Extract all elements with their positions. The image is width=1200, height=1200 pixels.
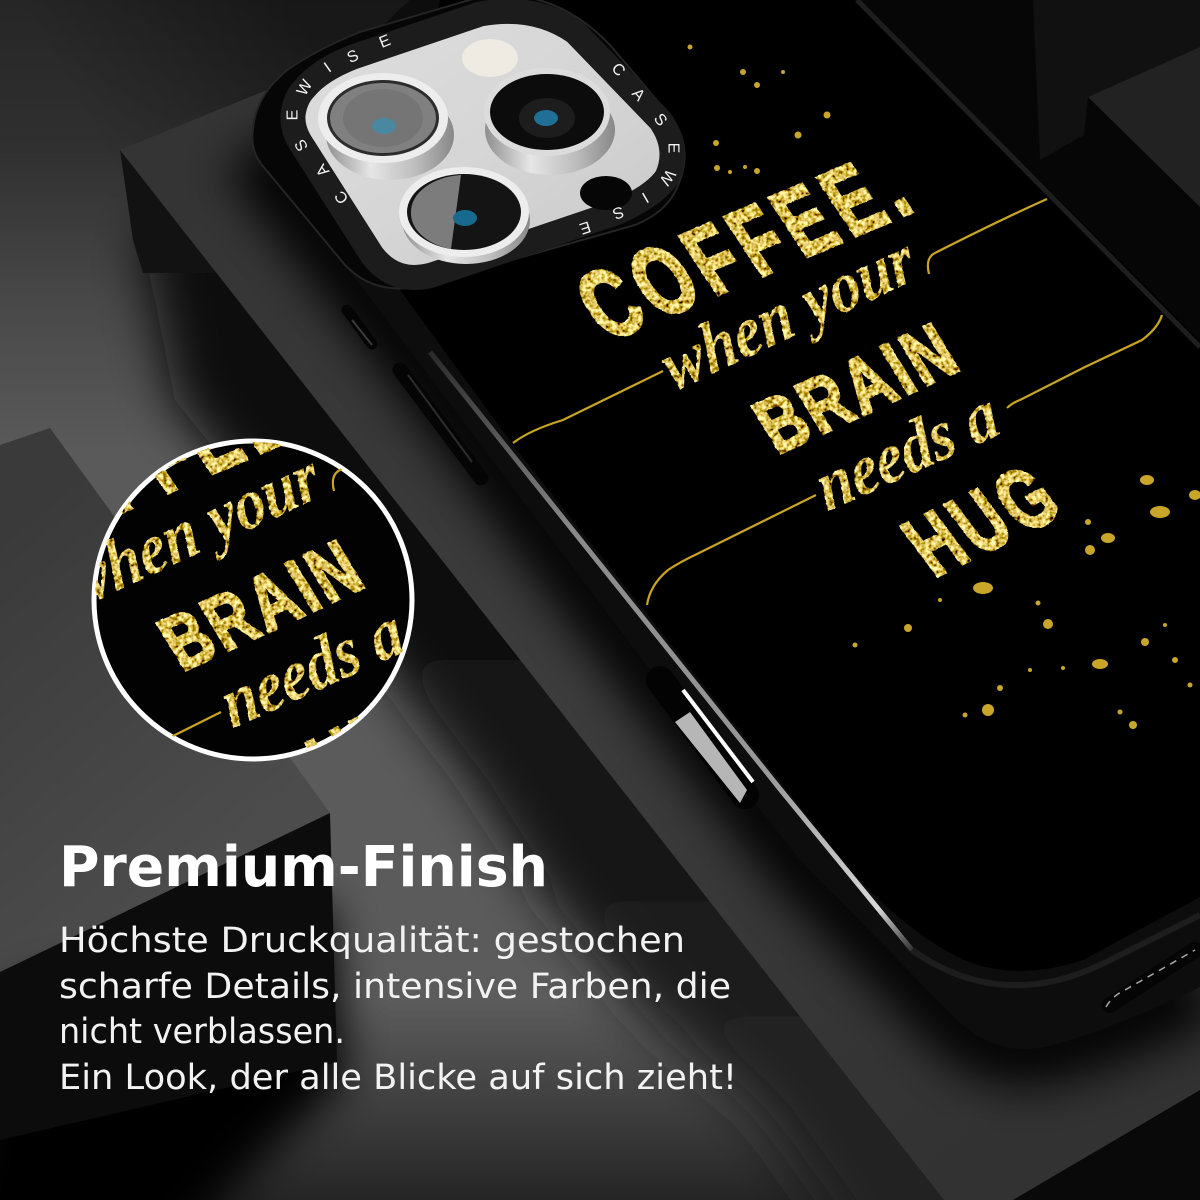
body text: scharfe Details, intensive Farben, die	[59, 967, 731, 1007]
COFFEE: COFFEE.	[557, 132, 936, 361]
CASEWISE ring text: S	[650, 111, 670, 129]
magnified gold text: BRAIN	[144, 523, 380, 686]
CASEWISE ring text: E	[284, 110, 302, 120]
phone case body	[253, 0, 1200, 1049]
CASEWISE ring text: I	[639, 189, 651, 205]
edge highlight	[430, 352, 912, 950]
microphone hole	[580, 176, 632, 210]
side button: silver	[660, 680, 753, 803]
lens 2	[484, 68, 615, 175]
CASEWISE ring text: E	[377, 32, 393, 52]
CASEWISE ring text: S	[292, 136, 312, 154]
phone shadow	[253, 150, 1200, 1049]
CASEWISE ring text: S	[345, 47, 361, 67]
island rim	[252, 0, 685, 288]
flash	[462, 39, 518, 77]
magnifier circle	[92, 438, 414, 762]
gold splatter	[688, 44, 1200, 729]
CASEWISE ring text: W	[655, 166, 678, 189]
artwork: gold text on phone	[557, 132, 1083, 594]
side button: upper	[400, 370, 481, 478]
body text	[59, 921, 737, 1098]
BRAIN: BRAIN	[739, 306, 975, 469]
magnified gold text	[95, 442, 404, 748]
CASEWISE ring text	[284, 32, 682, 237]
CASEWISE ring text: E	[664, 143, 682, 153]
heading: Premium-Finish	[59, 835, 548, 900]
lens 3	[399, 167, 530, 264]
CASEWISE ring text: C	[608, 60, 628, 80]
lens 1	[318, 73, 454, 180]
side button: small	[347, 310, 372, 345]
body text: Ein Look, der alle Blicke auf sich zieht!	[59, 1058, 737, 1098]
camera island	[252, 0, 685, 288]
HUG: HUG	[886, 446, 1083, 594]
CASEWISE ring text: I	[321, 60, 335, 76]
when your: when your	[651, 217, 926, 407]
body text: Höchste Druckqualität: gestochen	[59, 921, 685, 961]
needs a: needs a	[804, 372, 1008, 527]
charging port	[1106, 950, 1195, 1007]
CASEWISE ring text: C	[332, 187, 352, 207]
magnified gold text: when your	[56, 434, 331, 624]
lens plate with text band	[293, 11, 672, 278]
CASEWISE ring text: A	[628, 85, 648, 105]
body text: nicht verblassen.	[59, 1012, 345, 1052]
CASEWISE ring text: E	[577, 217, 593, 237]
magnified gold text: needs a	[209, 589, 413, 744]
CASEWISE ring text: S	[610, 202, 626, 222]
gold swash lines	[513, 199, 1162, 605]
screen	[400, 0, 1200, 971]
CASEWISE ring text: W	[294, 76, 317, 99]
CASEWISE ring text: A	[313, 160, 333, 179]
magnified gold text: HUG	[291, 663, 488, 811]
